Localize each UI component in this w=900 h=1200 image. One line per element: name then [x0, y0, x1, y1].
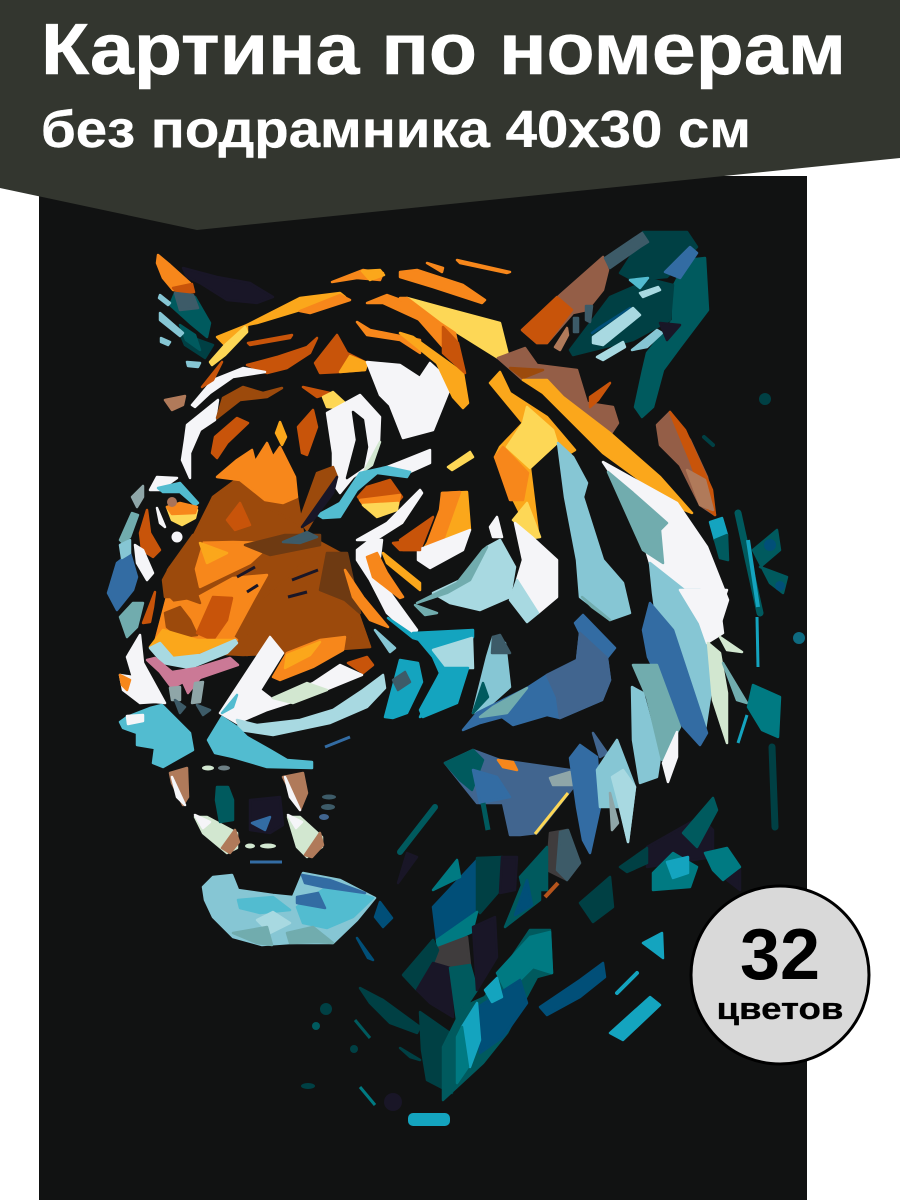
forehead stripes — [165, 260, 510, 478]
badge number: 32 — [740, 915, 820, 995]
title: Картина по номерам — [41, 10, 846, 90]
right eye — [357, 480, 470, 652]
left eye — [120, 477, 198, 557]
nose — [147, 658, 238, 715]
banner: dark header — [0, 0, 900, 230]
left ear — [157, 255, 273, 367]
upper face — [153, 443, 370, 655]
lower face — [150, 530, 388, 668]
shoulder bands — [463, 348, 747, 783]
muzzle — [120, 635, 385, 768]
teeth — [170, 766, 336, 862]
neck patches — [360, 733, 740, 1100]
badge label: цветов — [716, 991, 844, 1026]
white brow loop — [318, 395, 430, 518]
right ear — [522, 232, 708, 417]
illustration: tiger — [108, 232, 805, 1126]
subtitle: без подрамника 40х30 см — [41, 101, 751, 159]
paint splashes — [301, 393, 805, 1126]
badge: 32 colours — [691, 886, 869, 1064]
panel: black canvas — [39, 176, 807, 1200]
left cheek — [108, 540, 155, 637]
chin — [203, 873, 392, 960]
cheek stripes — [385, 517, 515, 718]
